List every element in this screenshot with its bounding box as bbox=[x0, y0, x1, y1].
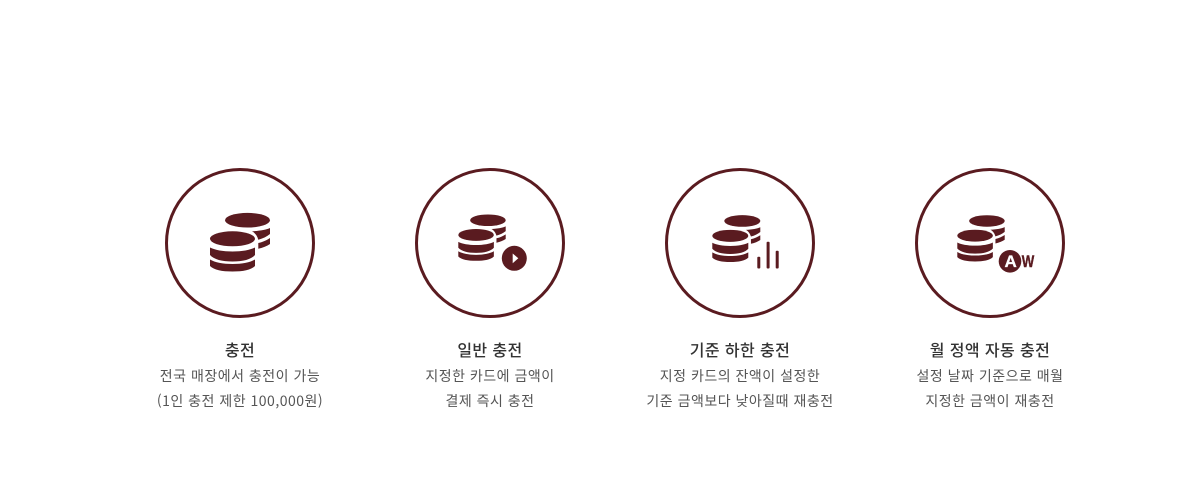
description line 1: 지정한 카드에 금액이 bbox=[425, 366, 555, 386]
icon: bars bbox=[757, 242, 779, 268]
description line 2: 지정한 금액이 재충전 bbox=[925, 391, 1055, 411]
description line 2: 결제 즉시 충전 bbox=[445, 391, 535, 411]
description line 2: (1인 충전 제한 100,000원) bbox=[157, 391, 323, 411]
heading: 월 정액 자동 충전 bbox=[930, 337, 1050, 361]
description line 1: 지정 카드의 잔액이 설정한 bbox=[660, 366, 820, 386]
heading: 기준 하한 충전 bbox=[690, 337, 790, 361]
icon: AW badge bbox=[999, 250, 1035, 273]
heading: 충전 bbox=[225, 337, 255, 361]
icon: coins bbox=[458, 214, 506, 261]
description line 1: 설정 날짜 기준으로 매월 bbox=[916, 366, 1064, 386]
icon circle: monthly auto charge bbox=[916, 170, 1064, 316]
icon: AW badge: W bbox=[1022, 252, 1035, 271]
icon circle: threshold charge bbox=[666, 170, 814, 316]
text: threshold charge bbox=[646, 337, 834, 411]
text: monthly auto charge bbox=[916, 337, 1064, 411]
icon: AW badge: A bbox=[1004, 252, 1017, 271]
heading: 일반 충전 bbox=[457, 337, 523, 361]
icon: coins bbox=[210, 213, 270, 272]
icon circle: charge bbox=[166, 170, 314, 316]
icon circle: general charge bbox=[416, 170, 564, 316]
icon: coins bbox=[712, 215, 760, 262]
description line 2: 기준 금액보다 낮아질때 재충전 bbox=[646, 391, 834, 411]
text: general charge bbox=[425, 337, 555, 411]
icon: coins bbox=[957, 215, 1005, 261]
text: charge bbox=[157, 337, 323, 411]
icon: play badge bbox=[502, 246, 527, 271]
description line 1: 전국 매장에서 충전이 가능 bbox=[160, 366, 320, 386]
